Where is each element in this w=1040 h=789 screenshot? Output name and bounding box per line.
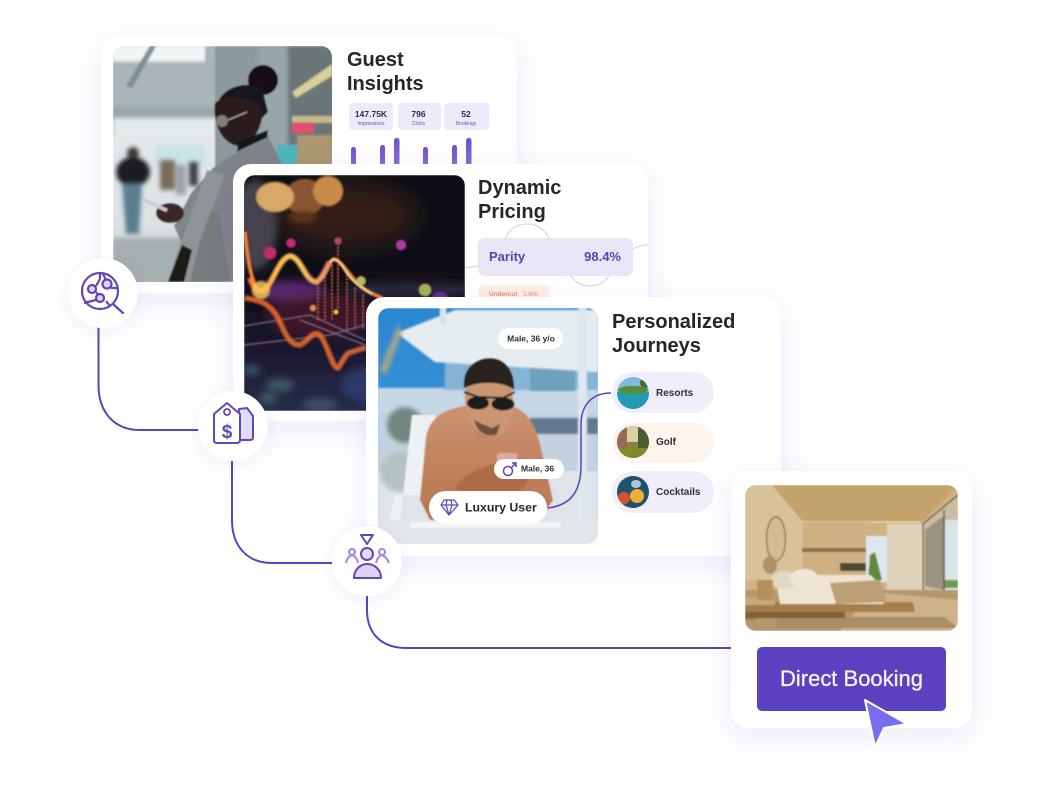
heading: dynamic pricing: Dynamic [478, 177, 561, 199]
row: parity: 98.4% [584, 249, 621, 264]
bar chart [351, 138, 472, 169]
panel: dynamic pricing [233, 164, 648, 421]
tag: male 36 with gender icon [494, 459, 564, 479]
icon badge: audience people [332, 526, 402, 596]
connector line: pricing to journeys [232, 458, 333, 563]
heading: personalized journeys: Personalized [612, 311, 735, 333]
connector: luxury user to resorts [548, 393, 611, 508]
photo: woman using phone in airport [113, 46, 335, 286]
pill: resorts [612, 372, 714, 413]
icon: cursor arrow [865, 700, 907, 747]
row: undercut: 1.6% [523, 291, 538, 298]
tag: luxury user: Luxury User [465, 500, 537, 514]
heading: personalized journeys: Journeys [612, 335, 701, 357]
stat: bookings: 52 [461, 109, 471, 119]
connector line: journeys to booking [367, 592, 735, 648]
button: direct booking: Direct Booking [780, 666, 923, 691]
row: parity [478, 238, 633, 276]
stat: bookings: Bookings [456, 121, 477, 127]
stat: clicks: 796 [411, 109, 426, 119]
panel: personalized journeys [366, 297, 781, 556]
heading: guest insights: Insights [347, 73, 424, 95]
panel: direct booking [731, 471, 972, 747]
heading: guest insights: Guest [347, 49, 404, 71]
stat: clicks: Clicks [412, 121, 426, 127]
stat: impressions: Impressions [358, 121, 385, 127]
panel: guest insights [101, 36, 517, 293]
pill: cocktails [612, 471, 714, 513]
tag: male 36 years old [498, 328, 563, 349]
stat: bookings [444, 103, 489, 130]
row: undercut: Undercut [489, 291, 518, 298]
photo: financial chart with bokeh [244, 175, 465, 411]
pill: resorts: Resorts [656, 388, 694, 399]
decorative connector arcs behind parity [465, 224, 648, 286]
photo: man with phone on lounger [378, 308, 598, 544]
stat: impressions: 147.75K [355, 109, 388, 119]
pill: golf: Golf [656, 437, 677, 448]
pill: golf [612, 423, 714, 463]
tag: male 36 with gender icon: Male, 36 [521, 464, 554, 474]
pill: cocktails: Cocktails [656, 487, 701, 498]
tag: luxury user [429, 491, 547, 524]
photo: luxury bedroom [745, 485, 958, 631]
stat: impressions [349, 103, 393, 130]
stat: clicks [398, 103, 441, 130]
button: direct booking [757, 647, 946, 711]
connector line: insights to pricing [98, 326, 200, 430]
row: parity: Parity [489, 249, 526, 264]
icon badge: price tags [198, 391, 268, 461]
icon badge: magnifier insights [68, 258, 138, 328]
icon badge: price tags: $ [222, 422, 233, 443]
heading: dynamic pricing: Pricing [478, 201, 546, 223]
tag: male 36 years old: Male, 36 y/o [507, 334, 555, 344]
row: undercut [478, 285, 549, 305]
